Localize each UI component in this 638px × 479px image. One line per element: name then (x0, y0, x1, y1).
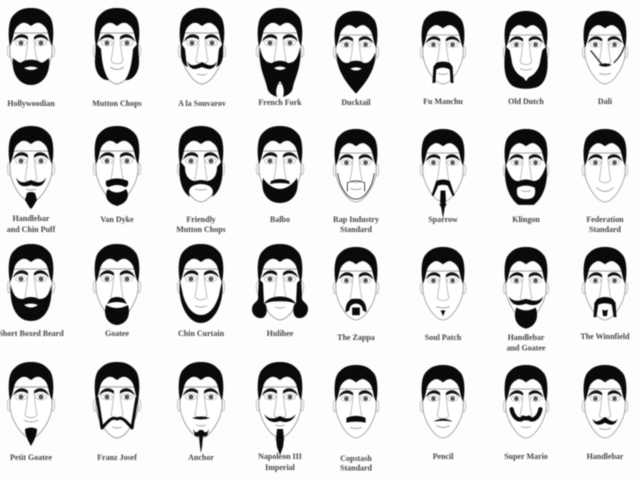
face: Handlebar (582, 365, 628, 461)
face: Federation Standard: Standard (589, 225, 622, 234)
face: French Fork (256, 8, 304, 107)
face: Pencil: Pencil (433, 452, 454, 461)
face: Petit Goatee: Petit Goatee (10, 453, 52, 462)
face: Dali (582, 11, 628, 106)
face: Handlebar and Goatee: Handlebar (508, 333, 545, 342)
face: French Fork: French Fork (258, 98, 302, 107)
face: Mutton Chops (92, 8, 142, 108)
face: Rap Industry Standard: Rap Industry (333, 215, 379, 224)
face: Ducktail: Ducktail (341, 98, 371, 107)
face: Hollywoodian: Hollywoodian (7, 99, 55, 108)
face: Franz Josef (93, 362, 141, 462)
face: Napoleon III Imperial: Napoleon III (258, 452, 302, 461)
face: Sparrow (420, 129, 466, 224)
face: Chin Curtain (177, 244, 225, 338)
face: Old Dutch (503, 11, 549, 106)
face: Rap Industry Standard: Standard (340, 225, 373, 234)
face: Handlebar and Chin Puff: and Chin Puff (7, 225, 56, 234)
face: Handlebar and Goatee: and Goatee (507, 344, 546, 353)
face: Hollywoodian (7, 8, 55, 108)
face: Balbo (256, 126, 304, 224)
face: Goatee: Goatee (105, 329, 129, 338)
face: The Winnfield: The Winnfield (580, 332, 630, 341)
face: The Zappa (333, 247, 379, 342)
face: Van Dyke: Van Dyke (100, 215, 134, 224)
face: Goatee (93, 244, 141, 338)
face: Van Dyke (93, 126, 141, 224)
face: Klingon (503, 129, 549, 224)
face: Franz Josef: Franz Josef (97, 453, 137, 462)
face: Copstash Standard: Copstash (340, 454, 372, 463)
face: A la Souvarov: A la Souvarov (178, 99, 226, 108)
face: Petit Goatee (7, 362, 55, 462)
face: Handlebar: Handlebar (587, 452, 624, 461)
face: Old Dutch: Old Dutch (508, 97, 544, 106)
face: Napoleon III Imperial: Imperial (265, 463, 296, 472)
face: Pencil (420, 365, 466, 461)
face: Super Mario (503, 365, 549, 461)
face: Federation Standard: Federation (586, 215, 624, 224)
face: Hulihee (252, 244, 308, 338)
face: Dali: Dali (598, 97, 613, 106)
face: Short Boxed Beard: Short Boxed Beard (0, 329, 64, 338)
face: Handlebar and Chin Puff (7, 126, 56, 234)
face: Copstash Standard: Standard (340, 464, 373, 473)
face: Friendly Mutton Chops: Friendly (186, 215, 216, 224)
face: Friendly Mutton Chops (176, 126, 226, 234)
face: Handlebar and Chin Puff: Handlebar (13, 214, 50, 223)
face: A la Souvarov (178, 8, 226, 108)
face: The Zappa: The Zappa (337, 333, 375, 342)
face: Soul Patch: Soul Patch (425, 333, 462, 342)
face: Mutton Chops: Mutton Chops (92, 99, 142, 108)
face: Anchor (177, 362, 225, 462)
face: Ducktail (333, 11, 379, 107)
face: Chin Curtain: Chin Curtain (178, 329, 225, 338)
face: Handlebar and Goatee (503, 247, 549, 353)
face: Sparrow: Sparrow (428, 215, 458, 224)
face: Friendly Mutton Chops: Mutton Chops (176, 225, 226, 234)
face: Super Mario: Super Mario (504, 452, 548, 461)
face: Copstash Standard (333, 365, 379, 473)
face: Balbo: Balbo (270, 215, 290, 224)
face: Napoleon III Imperial (256, 362, 304, 472)
face: Short Boxed Beard (0, 244, 64, 338)
face: Federation Standard (582, 129, 628, 234)
face: Fu Manchu (420, 11, 466, 106)
face: Anchor: Anchor (188, 453, 214, 462)
face: Soul Patch (420, 247, 466, 342)
face: Klingon: Klingon (512, 215, 540, 224)
face: The Winnfield (580, 247, 630, 341)
face: Hulihee: Hulihee (267, 329, 294, 338)
face: Fu Manchu: Fu Manchu (423, 97, 463, 106)
face: Rap Industry Standard (333, 129, 379, 234)
